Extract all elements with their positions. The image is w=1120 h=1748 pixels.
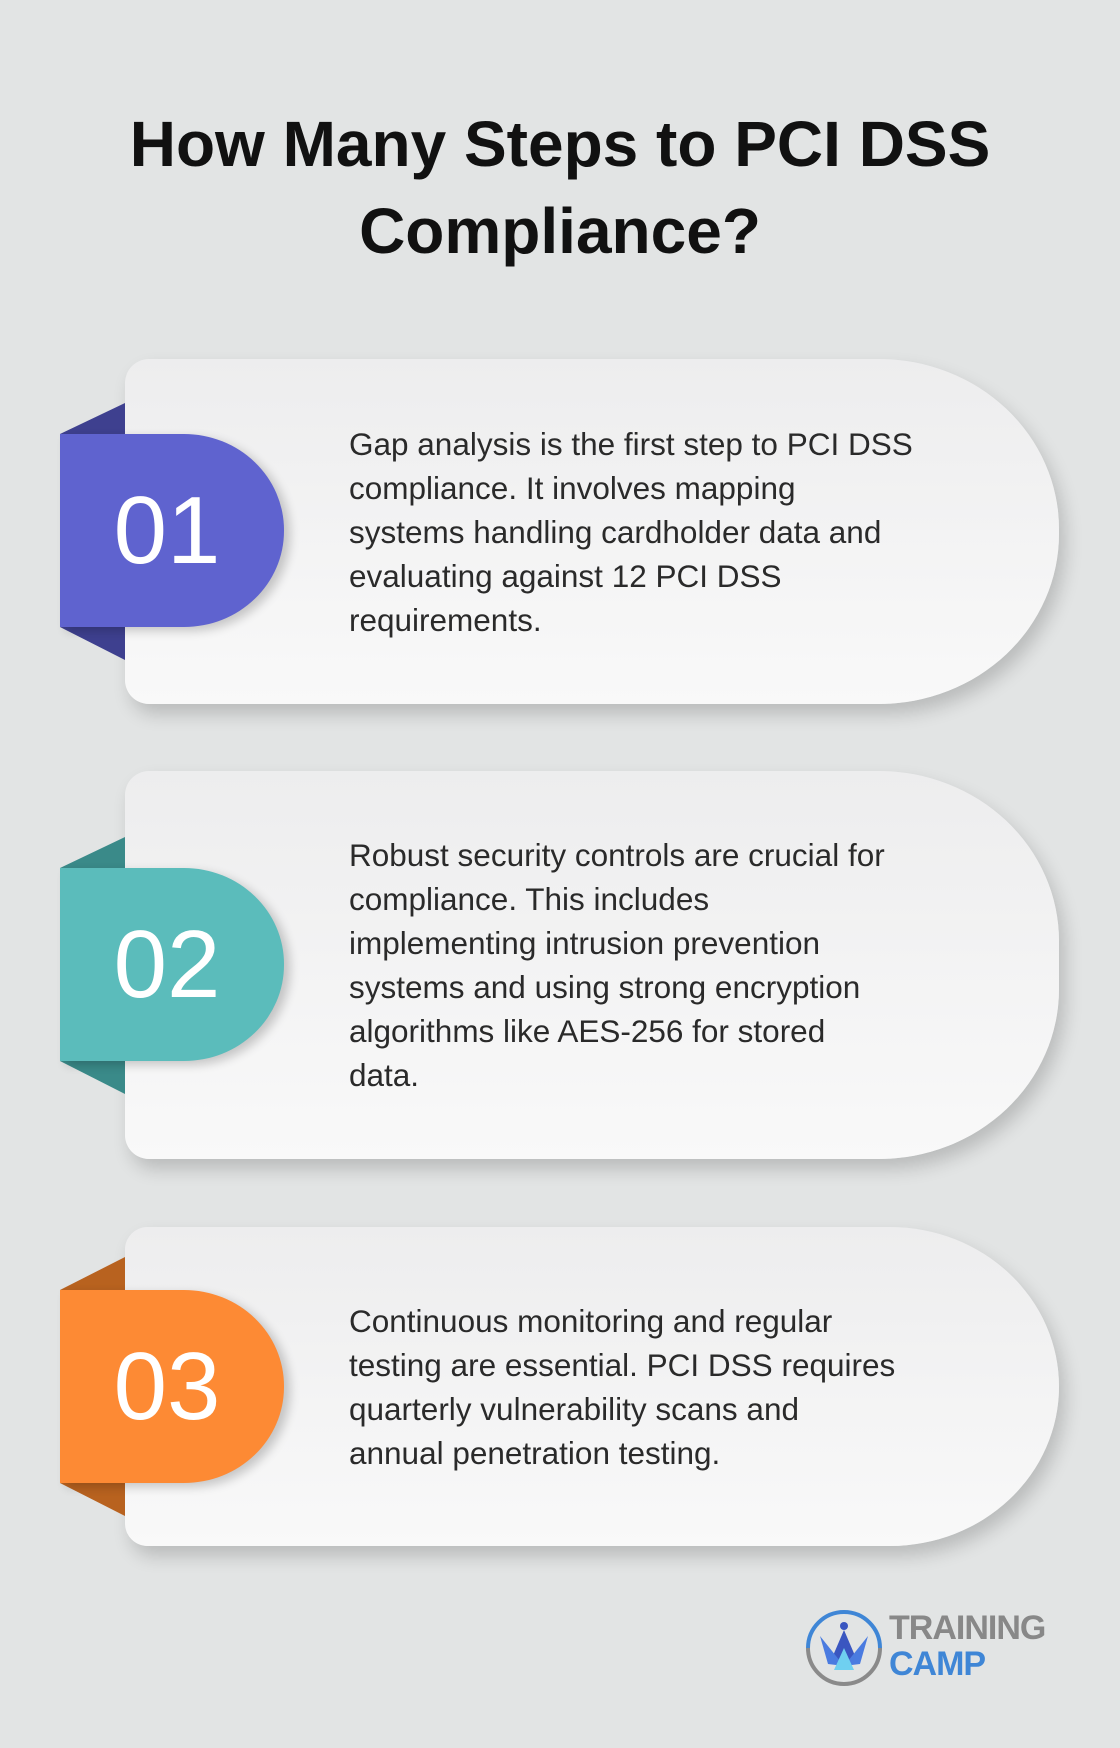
badge: 03: [60, 1290, 284, 1483]
fold: step 1 top: [60, 403, 125, 434]
panel: step 3: testing are essential. PCI DSS requires: [349, 1346, 895, 1382]
panel: step 2: [125, 771, 1059, 1159]
fold: step 2 bottom: [60, 1061, 125, 1094]
title: [130, 108, 990, 267]
fold: step 3 top: [60, 1257, 125, 1290]
badge: 03: 03: [114, 1333, 220, 1440]
panel: step 2: compliance. This includes: [349, 881, 709, 917]
panel: step 1: requirements.: [349, 602, 542, 638]
panel: step 2: algorithms like AES-256 for stored: [349, 1013, 825, 1049]
panel: step 2: systems and using strong encryption: [349, 969, 860, 1005]
panel: step 1: [125, 359, 1059, 704]
fold: step 1 bottom: [60, 627, 125, 660]
logo: [806, 1609, 1045, 1686]
panel: step 1: systems handling cardholder data and: [349, 514, 881, 550]
icon: logo emblem: [806, 1610, 882, 1686]
fold: step 2 top: [60, 837, 125, 868]
badge: 02: [60, 868, 284, 1061]
logo text: TRAINING: [889, 1609, 1045, 1647]
panel: step 3: annual penetration testing.: [349, 1434, 720, 1470]
panel: step 3: Continuous monitoring and regular: [349, 1302, 832, 1338]
panel: step 2: Robust security controls are crucial for: [349, 837, 885, 873]
panel: step 1: evaluating against 12 PCI DSS: [349, 558, 782, 594]
panel: step 1: compliance. It involves mapping: [349, 470, 795, 506]
title: Compliance?: [359, 195, 761, 267]
fold: step 3 bottom: [60, 1483, 125, 1516]
logo text: [889, 1609, 1045, 1683]
badge: 02: 02: [114, 911, 220, 1018]
title: How Many Steps to PCI DSS: [130, 108, 990, 180]
panel: step 2: implementing intrusion prevention: [349, 925, 820, 961]
panel: step 3: [125, 1227, 1059, 1546]
panel: step 3: quarterly vulnerability scans and: [349, 1390, 799, 1426]
badge: 01: 01: [114, 477, 220, 584]
logo text: CAMP: [889, 1645, 985, 1683]
panel: step 2: data.: [349, 1057, 419, 1093]
panel: step 1: Gap analysis is the first step to PCI DSS: [349, 426, 913, 462]
badge: 01: [60, 434, 284, 627]
